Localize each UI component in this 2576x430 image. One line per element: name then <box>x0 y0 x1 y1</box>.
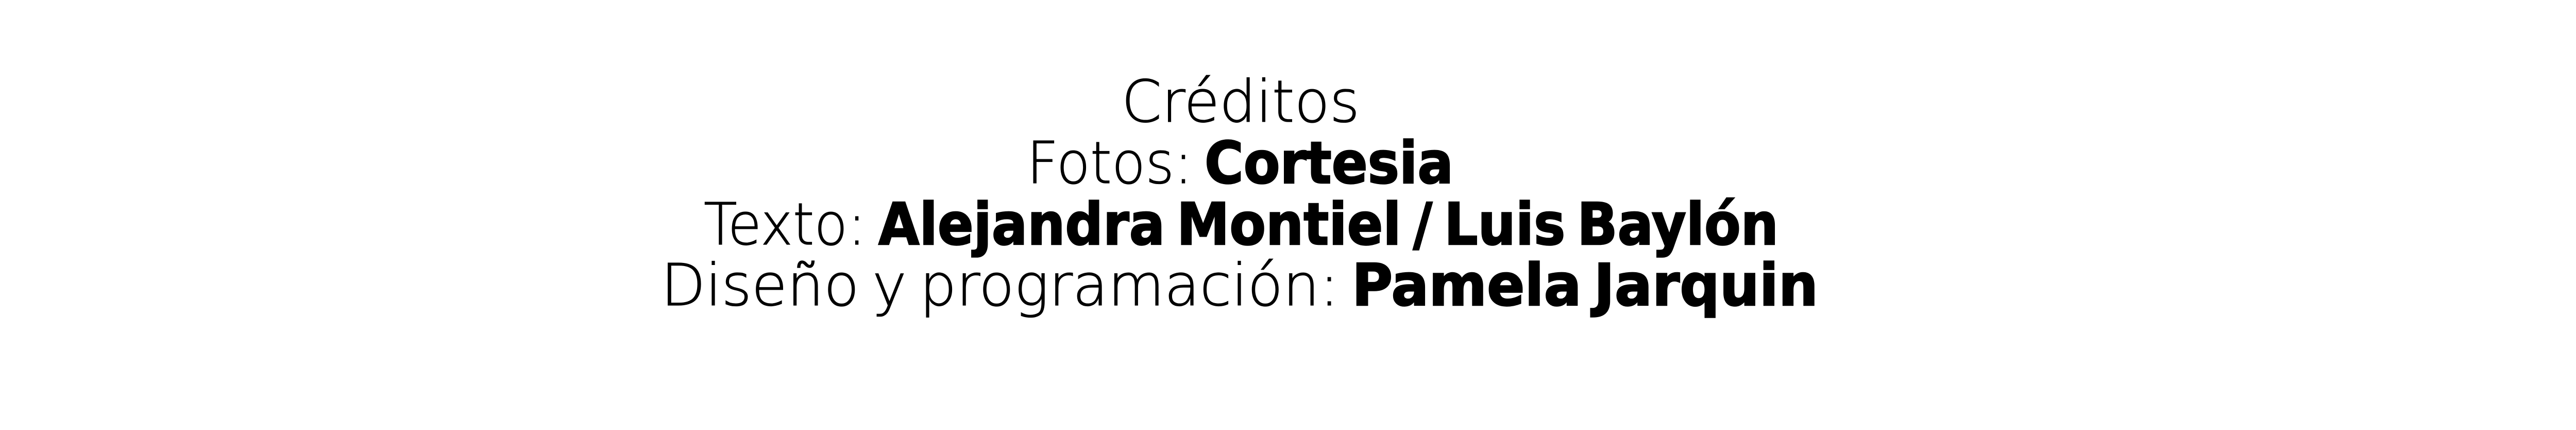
text line: text credit: Texto: <box>704 191 866 258</box>
text line: text credit: Alejandra Montiel / Luis Baylón <box>878 191 1778 258</box>
text line: photo credit <box>1027 130 1453 197</box>
text line: photo credit: Cortesia <box>1205 130 1453 197</box>
text line: design and programming credit: Pamela Jarquin <box>1352 252 1818 319</box>
text line: design and programming credit: Diseño y programación: <box>661 252 1339 319</box>
heading: Créditos: Créditos <box>1122 69 1360 136</box>
text line: photo credit: Fotos: <box>1027 130 1193 197</box>
text line: design and programming credit <box>661 252 1818 319</box>
